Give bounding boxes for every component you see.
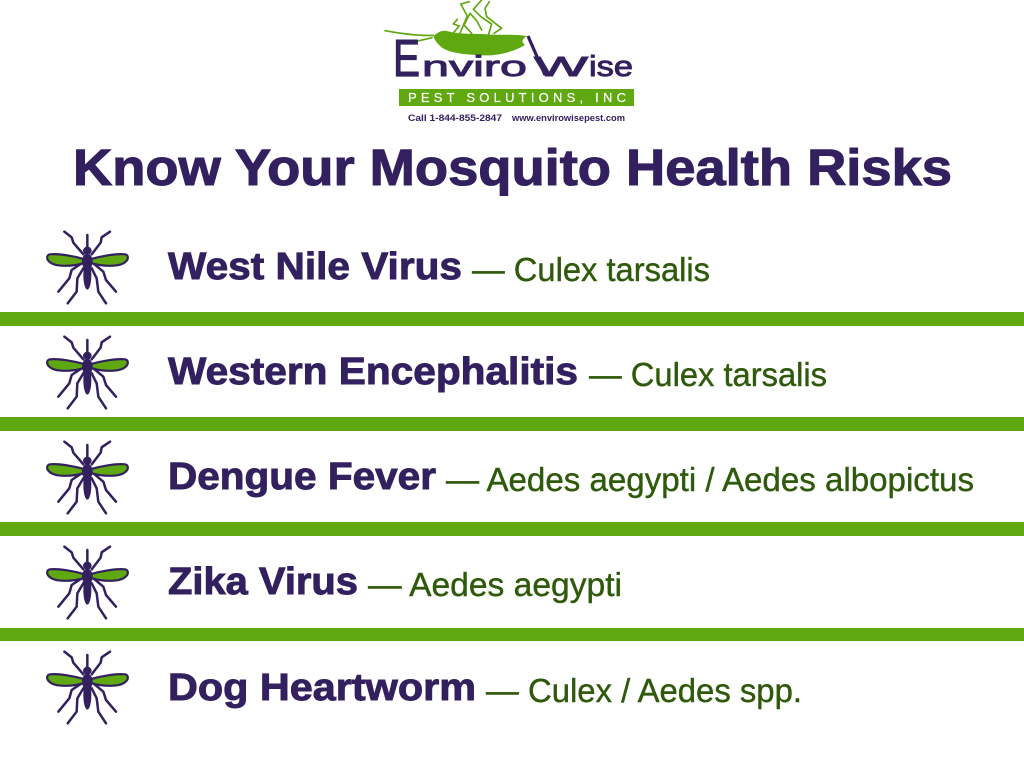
disease name: West Nile Virus [168, 246, 462, 288]
row: Western Encephalitis [47, 337, 827, 408]
mosquito species: — Aedes aegypti [368, 566, 622, 603]
title: Know Your Mosquito Health Risks [73, 139, 952, 196]
divider bar 1 [0, 312, 1024, 326]
logo green banner [399, 89, 634, 106]
divider bar 2 [0, 417, 1024, 431]
logo contact line: www.envirowisepest.com [511, 113, 625, 123]
logo wordmark [393, 30, 633, 88]
icon: mosquito [47, 547, 128, 618]
logo wordmark: nviro [422, 51, 527, 83]
row: Dog Heartworm [47, 652, 802, 723]
logo wordmark: W [534, 51, 589, 82]
mosquito species: — Aedes aegypti / Aedes albopictus [446, 461, 974, 498]
disease name: Dog Heartworm [168, 667, 476, 709]
logo wordmark: E [393, 30, 420, 88]
disease name: Western Encephalitis [168, 351, 578, 393]
row: Dengue Fever [47, 442, 974, 513]
logo wordmark: ise [589, 51, 633, 83]
logo contact line [408, 113, 625, 123]
logo tagline: PEST SOLUTIONS, INC [408, 90, 626, 105]
icon: mosquito [47, 652, 128, 723]
divider bar 3 [0, 522, 1024, 536]
logo contact line: Call 1-844-855-2847 [408, 113, 502, 123]
mosquito species: — Culex / Aedes spp. [486, 672, 802, 709]
logo icon: green insect [385, 0, 527, 55]
row: West Nile Virus [47, 232, 710, 303]
mosquito species: — Culex tarsalis [589, 356, 827, 393]
logo: EnviroWise Pest Solutions [385, 0, 634, 123]
icon: mosquito [47, 442, 128, 513]
mosquito species: — Culex tarsalis [472, 251, 710, 288]
row: Zika Virus [47, 547, 622, 618]
divider bar 4 [0, 628, 1024, 641]
icon: mosquito [47, 337, 128, 408]
disease name: Dengue Fever [168, 456, 436, 498]
icon: mosquito [47, 232, 128, 303]
disease name: Zika Virus [168, 561, 358, 603]
